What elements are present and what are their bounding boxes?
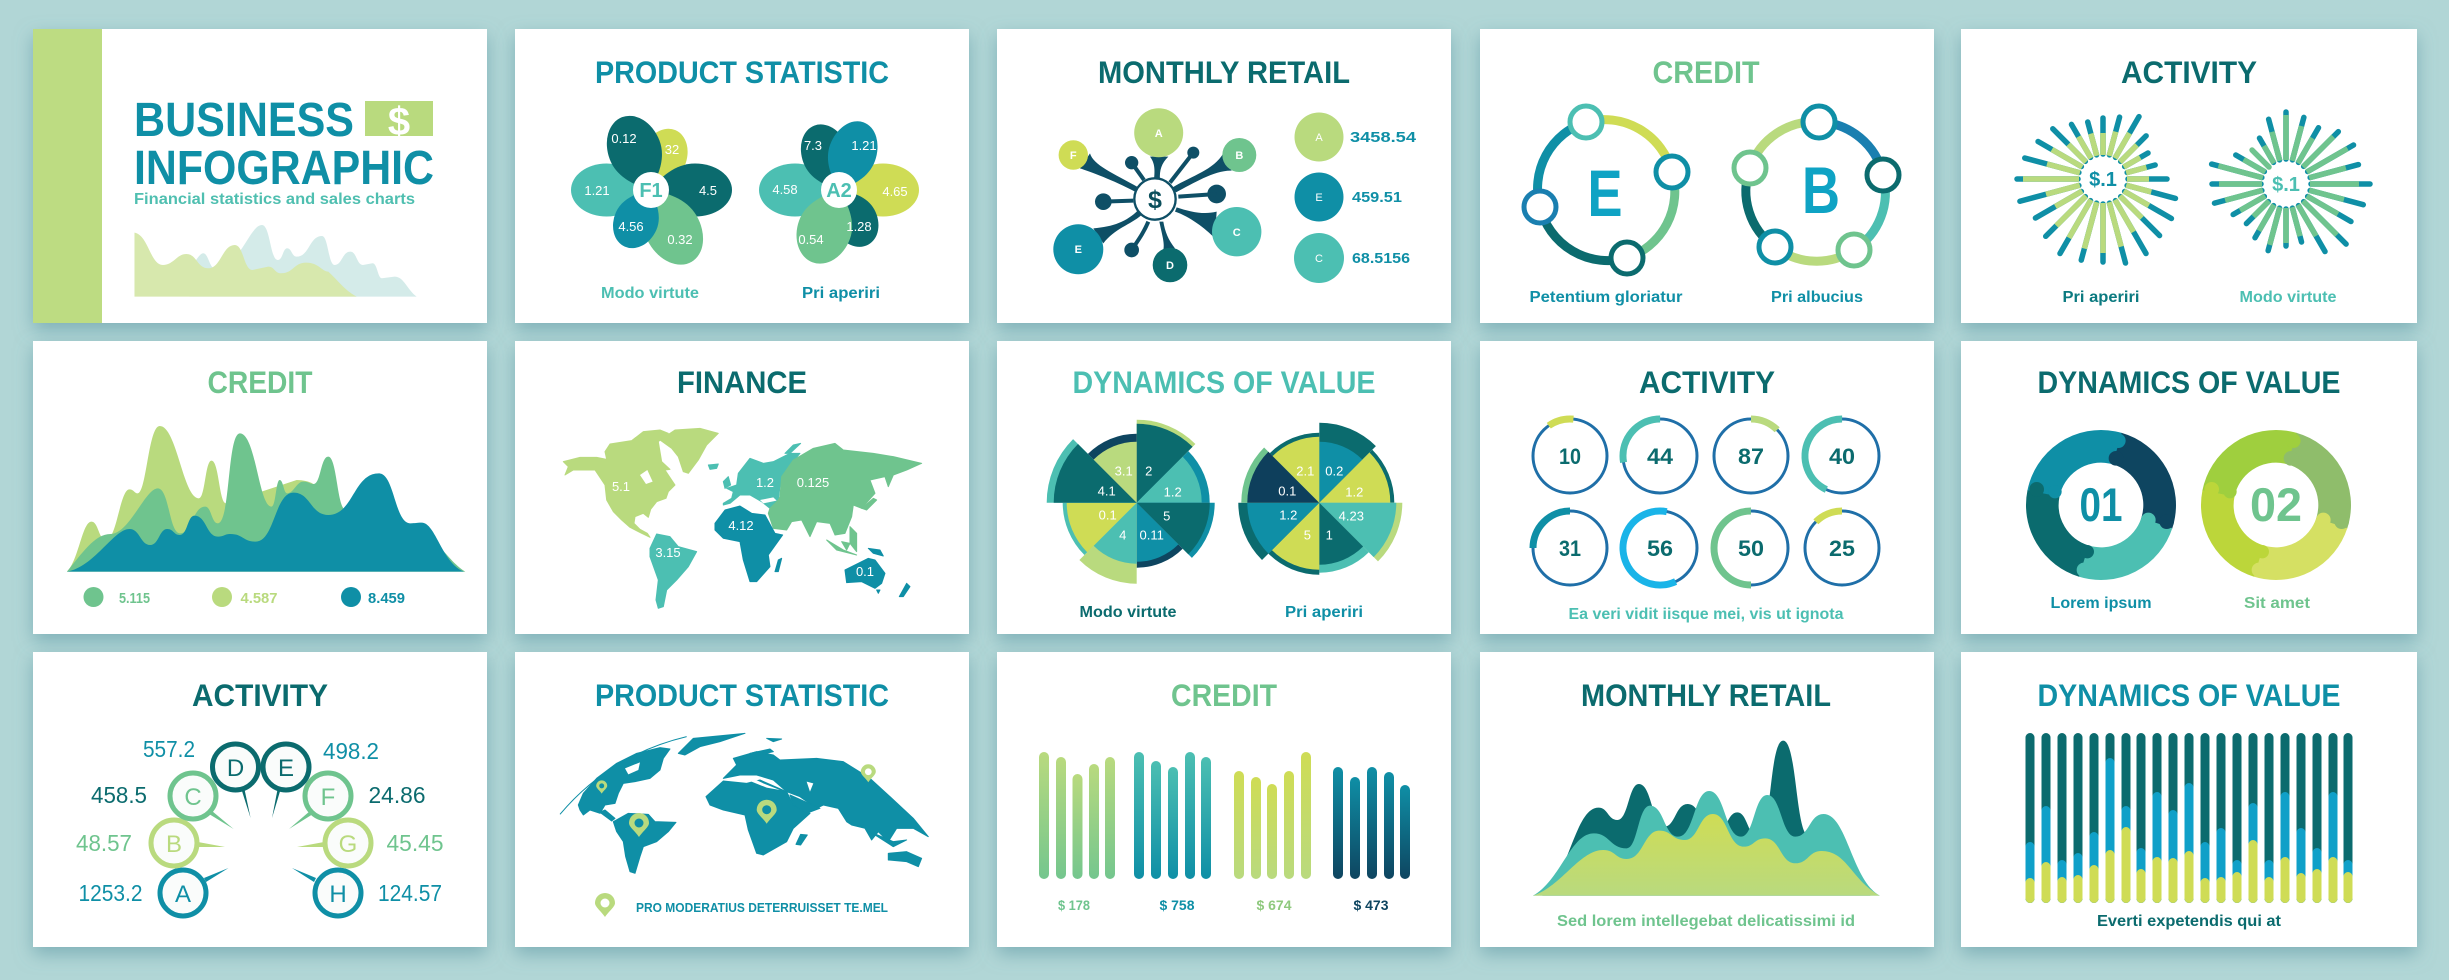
network diagram: $ [1148,186,1162,214]
bar group 4 [1333,767,1410,879]
bar group 2 [1134,752,1211,879]
progress ring 40 [1793,407,1891,505]
pins [861,764,876,782]
sunburst chart 1: $.1 [2089,169,2117,191]
heading: ACTIVITY [1639,364,1775,400]
donut chart 02 [2202,431,2350,579]
value 674: $ 674 [1256,897,1292,913]
dial values: 498.2 [323,738,379,764]
legend item 5.115: 5.115 [119,590,150,607]
network diagram: C [1233,227,1241,239]
network diagram: B [1235,150,1243,162]
heading: MONTHLY RETAIL [1098,54,1350,90]
flower chart F1: 4.56 [618,219,644,234]
flower chart F1: 4.5 [699,183,717,198]
progress ring 50 [1714,511,1788,585]
polar pie chart 2: 1.2 [1279,508,1297,523]
donut chart 02: 02 [2250,478,2302,531]
flower chart F1: 32 [665,142,679,157]
legend: E 459.51: E [1315,192,1323,204]
caption: Sed lorem intellegebat delicatissimi id [1557,913,1855,930]
panel: activity sunbursts [1961,29,2417,323]
bar group 1 [1039,752,1115,879]
polar pie chart 2: 2.1 [1296,464,1314,479]
globe map [560,733,928,873]
dial F: F [321,784,335,811]
progress ring 25: 25 [1829,536,1855,561]
legend: A 3458.54: 3458.54 [1350,129,1417,146]
progress ring 56 [1611,499,1709,597]
polar pie chart 1: 0.11 [1140,528,1164,543]
dial E: E [278,755,294,782]
green side band [33,29,102,323]
legend: C 68.5156: C [1315,253,1323,265]
label: lorem ipsum: Lorem ipsum [2050,595,2152,612]
area chart [1533,741,1880,896]
network diagram: F [1070,150,1077,162]
caption: Everti expetendis qui at [2097,913,2282,930]
legend: A 3458.54: A [1315,132,1323,144]
value 473: $ 473 [1354,897,1389,913]
label: modo virtute: Modo virtute [1080,604,1177,621]
dial values: 45.45 [386,830,444,856]
panel: dynamics of value donuts [1961,341,2417,634]
polar pie chart 1 [1047,420,1215,584]
flower chart F1 [571,108,732,276]
sunburst chart 2 [2212,112,2370,252]
legend item 5.115 [84,587,150,607]
dial A [160,868,228,916]
polar pie chart 2 [1238,423,1402,575]
panel: credit area chart [33,341,487,634]
stacked bar chart [2030,738,2348,898]
polar pie chart 2: 1.2 [1345,485,1363,500]
world map [563,428,922,608]
panel: dynamics of value stacked bars [1961,652,2417,947]
heading: CREDIT [208,364,312,400]
dial H: H [329,881,347,908]
ring chart E [1524,106,1688,274]
flower chart A2: 1.21 [851,138,877,153]
dial G [297,820,371,866]
progress ring 50: 50 [1738,536,1764,561]
progress ring 10: 10 [1559,444,1581,469]
legend item 4.587 [212,587,278,607]
legend: C 68.5156 [1294,233,1410,283]
heading: PRODUCT STATISTIC [595,677,889,713]
progress ring 87 [1714,419,1788,493]
polar pie chart 1: 4.1 [1098,484,1116,499]
progress ring 44: 44 [1647,444,1674,469]
world map: 1.2 [756,475,774,490]
panel: dynamics of value pies [997,341,1451,634]
network diagram: A [1155,128,1163,140]
world map: 5.1 [612,479,630,494]
world map: 4.12 [728,518,754,533]
value 758: $ 758 [1160,897,1195,913]
heading: DYNAMICS OF VALUE [1072,364,1376,400]
legend item 8.459 [341,587,405,607]
dial values [76,736,444,906]
flower chart F1: 0.32 [667,232,693,247]
panel: monthly retail area chart [1480,652,1934,947]
progress ring 56: 56 [1647,536,1673,561]
panel: activity dials [33,652,487,947]
value 178: $ 178 [1058,897,1090,913]
flower chart F1: F1 [639,180,663,202]
panel: cover [33,29,487,323]
dial D: D [227,755,244,782]
donut chart 01: 01 [2080,478,2122,531]
heading: ACTIVITY [2121,54,2257,90]
dial values: 557.2 [143,736,195,762]
heading: PRODUCT STATISTIC [595,54,889,90]
polar pie chart 1: 0.1 [1099,508,1117,523]
progress ring 31 [1533,511,1607,585]
ring chart E: E [1588,156,1622,230]
label: modo virtute: Modo virtute [2240,289,2337,306]
panel: product statistic globe [515,652,969,947]
label: modo virtute: Modo virtute [601,285,699,302]
dial D [212,744,258,818]
flower chart F1: 0.12 [611,131,637,146]
panel: monthly retail network [997,29,1451,323]
ring chart B: B [1802,153,1840,227]
icon: dollar box: $ [388,100,410,144]
label: pri aperiri: Pri aperiri [2062,289,2140,306]
world map: 0.1 [856,564,874,579]
dial F [289,773,351,829]
dial E [263,744,309,818]
area chart [67,426,465,572]
heading: CREDIT [1171,677,1277,713]
polar pie chart 2: 0.2 [1325,464,1343,479]
donut chart 01 [2027,431,2175,579]
legend: E 459.51: 459.51 [1352,189,1402,206]
panel: credit bar groups [997,652,1451,947]
dial G: G [339,831,357,858]
legend: A 3458.54 [1294,112,1417,162]
mini area chart [134,225,417,297]
legend item 8.459: 8.459 [368,590,405,607]
polar pie chart 1: 4 [1119,528,1126,543]
polar pie chart 1: 5 [1163,509,1170,524]
legend text: PRO MODERATIUS DETERRUISSET TE.MEL [636,900,888,915]
subtitle: Financial statistics and sales charts [134,191,415,208]
label: sit amet: Sit amet [2244,595,2311,612]
progress ring 10 [1518,404,1622,508]
flower chart A2: 4.58 [772,182,798,197]
bar group 3 [1234,752,1311,879]
network diagram: D [1166,260,1174,272]
dial values: 1253.2 [78,880,142,906]
legend pin icon [595,893,615,917]
polar pie chart 2: 4.23 [1339,509,1364,524]
title: business: BUSINESS [134,94,354,147]
world map: 0.125 [797,475,829,490]
heading: MONTHLY RETAIL [1581,677,1831,713]
polar pie chart 2: 5 [1304,528,1311,543]
flower chart A2: A2 [826,180,852,202]
dial C [170,773,234,829]
label: petentium gloriatur: Petentium gloriatur [1530,289,1682,306]
dial C: C [184,784,202,811]
label: pri albucius: Pri albucius [1771,289,1863,306]
heading: DYNAMICS OF VALUE [2038,677,2340,713]
legend item 4.587: 4.587 [240,590,278,607]
progress ring 87: 87 [1738,444,1764,469]
progress ring 25 [1790,496,1894,600]
panel: credit rings [1480,29,1934,323]
progress ring 31: 31 [1559,536,1581,561]
flower chart A2: 4.65 [882,184,908,199]
flower chart A2 [759,114,919,272]
dial values: 48.57 [76,830,132,856]
legend: E 459.51 [1294,172,1402,222]
sunburst chart 2: $.1 [2272,174,2300,196]
panel: product statistic flowers [515,29,969,323]
polar pie chart 2: 1 [1326,528,1333,543]
heading: DYNAMICS OF VALUE [2038,364,2340,400]
flower chart F1: 1.21 [584,183,610,198]
heading: FINANCE [677,364,807,400]
network diagram [1053,108,1261,282]
sunburst chart 1 [2017,117,2175,263]
dial values: 24.86 [368,782,426,808]
title: infographic: INFOGRAPHIC [134,142,434,195]
heading: CREDIT [1652,54,1760,90]
ring chart B [1734,106,1899,266]
label: pri aperiri: Pri aperiri [1285,604,1363,621]
panel: finance world map [515,341,969,634]
dial A: A [175,881,191,908]
flower chart A2: 7.3 [804,138,822,153]
flower chart A2: 0.54 [798,232,824,247]
dial B [151,820,225,866]
world map: 3.15 [655,545,681,560]
panel: activity progress rings [1480,341,1934,634]
legend: C 68.5156: 68.5156 [1352,250,1410,267]
progress ring 40: 40 [1829,444,1855,469]
polar pie chart 2: 0.1 [1278,484,1296,499]
dial B: B [166,831,182,858]
polar pie chart 1: 2 [1145,464,1152,479]
heading: ACTIVITY [192,677,328,713]
dial values: 458.5 [91,782,147,808]
polar pie chart 1: 1.2 [1164,485,1182,500]
icon: dollar box [365,100,433,144]
progress ring 44 [1617,413,1703,499]
flower chart A2: 1.28 [846,219,872,234]
caption: Ea veri vidit iisque mei, vis ut ignota [1568,606,1844,623]
network diagram: E [1075,244,1082,256]
polar pie chart 1: 3.1 [1115,464,1133,479]
dial H [292,868,361,916]
label: pri aperiri: Pri aperiri [802,285,880,302]
dial values: 124.57 [378,880,442,906]
